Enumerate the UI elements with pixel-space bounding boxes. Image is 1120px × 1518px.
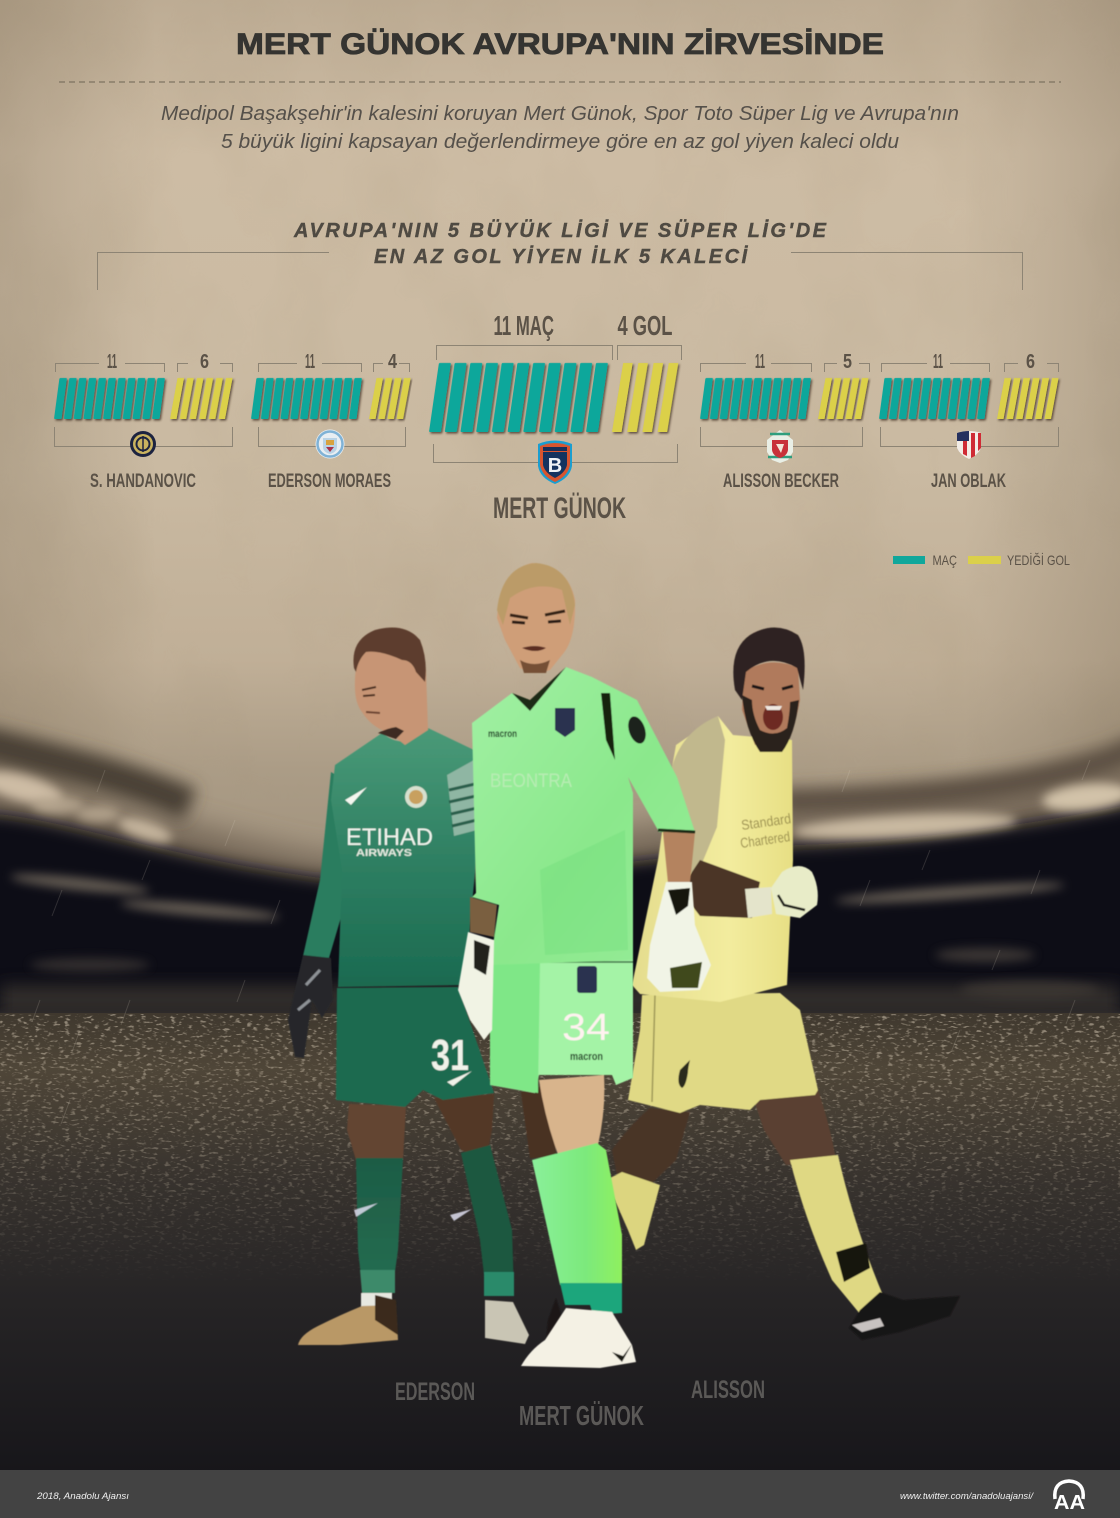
goalkeeper: Alisson Becker (700, 351, 870, 492)
goalkeeper: Mert Günok (highlighted): MERT GÜNOK (493, 492, 626, 525)
icon: Anadolu Agency logo (1054, 1481, 1085, 1514)
player illustration: Mert Günok: 34 (562, 1007, 610, 1049)
footer copyright: 2018, Anadolu Ajansı (36, 1491, 130, 1501)
player illustration: Ederson: AIRWAYS (356, 848, 412, 859)
goalkeeper: S. Handanovic (54, 351, 233, 492)
goalkeeper: Mert Günok (highlighted): 11 MAÇ (494, 310, 554, 341)
chart heading: AVRUPA'NIN 5 BÜYÜK LİGİ VE SÜPER LİG'DE (293, 219, 827, 242)
footer bar (0, 1470, 1120, 1518)
player name: Mert Günok: MERT GÜNOK (519, 1400, 644, 1431)
goalkeeper: S. Handanovic: 11 (107, 351, 117, 373)
goalkeeper: Jan Oblak: 11 (933, 351, 943, 373)
subtitle (161, 103, 959, 153)
player illustration: Mert Günok: macron (488, 729, 517, 740)
goalkeeper: Alisson Becker: 11 (755, 351, 765, 373)
goalkeeper: Alisson Becker: ALISSON BECKER (723, 471, 839, 492)
player illustration: Mert Günok (458, 563, 711, 1368)
player name: Ederson: EDERSON (395, 1378, 475, 1406)
player illustration: Ederson: ETIHAD (346, 824, 433, 851)
goalkeeper: S. Handanovic: 6 (200, 351, 209, 373)
subtitle: 5 büyük ligini kapsayan değerlendirmeye göre en az gol yiyen kaleci oldu (221, 131, 899, 153)
legend: MAÇ (932, 552, 957, 568)
goalkeeper: Jan Oblak (879, 351, 1059, 492)
player illustration: Ederson: 31 (431, 1031, 469, 1080)
goalkeeper: Ederson Moraes: 4 (388, 351, 398, 373)
background: parchment sky and stadium (0, 0, 1120, 1100)
rain streaks (32, 760, 1090, 1124)
legend (893, 551, 1070, 568)
subtitle: Medipol Başakşehir'in kalesini koruyan Mert Günok, Spor Toto Süper Lig ve Avrupa'nın (161, 103, 959, 125)
goalkeeper: Jan Oblak: JAN OBLAK (931, 471, 1006, 492)
legend: YEDİĞİ GOL (1007, 551, 1070, 568)
title: MERT GÜNOK AVRUPA'NIN ZİRVESİNDE (236, 28, 884, 61)
background: pitch grass (0, 1013, 1120, 1473)
goalkeeper: Mert Günok (highlighted) (429, 310, 682, 525)
player illustration: Alisson (546, 628, 960, 1352)
goalkeeper: Alisson Becker: 5 (843, 351, 852, 373)
player illustration: Ederson (288, 628, 529, 1345)
goalkeeper: Jan Oblak: 6 (1026, 351, 1035, 373)
goalkeeper: Mert Günok (highlighted): B (548, 455, 562, 477)
chart heading (293, 219, 827, 268)
player illustration: Mert Günok: BEONTRA (490, 771, 572, 792)
goalkeeper: Ederson Moraes: 11 (305, 351, 315, 373)
player illustration: Mert Günok: macron (570, 1051, 603, 1063)
goalkeeper: Ederson Moraes: EDERSON MORAES (268, 471, 391, 492)
player illustration: Alisson: Chartered (739, 828, 791, 851)
goalkeeper: Mert Günok (highlighted): 4 GOL (618, 310, 672, 341)
goalkeeper: S. Handanovic: S. HANDANOVIC (90, 471, 196, 492)
player name: Alisson: ALISSON (691, 1376, 765, 1404)
chart heading: EN AZ GOL YİYEN İLK 5 KALECİ (374, 245, 748, 268)
goalkeeper: Ederson Moraes (251, 351, 411, 492)
footer link: www.twitter.com/anadoluajansi/ (900, 1491, 1035, 1501)
player illustration: Alisson: Standard (740, 810, 792, 833)
icon: Anadolu Agency logo: AA (1054, 1492, 1085, 1514)
